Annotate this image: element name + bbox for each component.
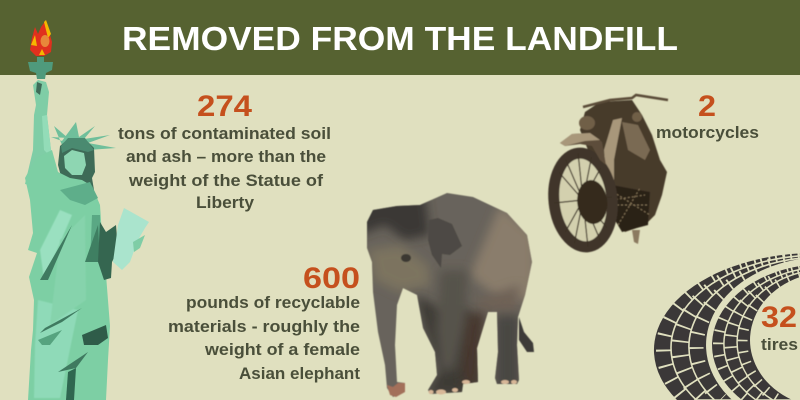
tablet hand [133, 235, 145, 252]
stat: 2 motorcycles: 2 [698, 90, 716, 123]
elephant toes [428, 380, 517, 394]
overgrown plants [606, 185, 650, 232]
elephant [355, 193, 535, 397]
hair and neck shadow [58, 139, 95, 190]
crown band [61, 138, 94, 153]
stat: 600 pounds of recyclables: weight of a female [204, 341, 360, 359]
elephant eye [401, 254, 411, 262]
stat: 32 tires: tires [761, 336, 798, 354]
stat: 274 tons of soil: 274 [197, 90, 252, 123]
front forks [604, 118, 622, 180]
stat: 600 pounds of recyclables: pounds of recyclable [186, 294, 360, 312]
tablet [113, 208, 149, 270]
trunk tip [387, 383, 405, 397]
stat: 600 pounds of recyclables: Asian elephant [239, 365, 361, 383]
front fender [560, 133, 606, 165]
statue of liberty [25, 20, 149, 400]
crown spikes [51, 122, 116, 150]
stat: 32 tires: 32 [761, 301, 797, 334]
stat: 274 tons of soil [118, 90, 331, 212]
raised arm and shoulder [25, 80, 56, 190]
stat: 274 tons of soil: and ash – more than the [126, 148, 326, 166]
handlebars [583, 95, 668, 107]
face [64, 150, 86, 175]
headlamp parts [579, 116, 595, 130]
title: REMOVED FROM THE LANDFILL [122, 20, 678, 57]
torch cup and handle [28, 57, 53, 79]
stat: 274 tons of soil: tons of contaminated soil [118, 125, 331, 143]
stat: 600 pounds of recyclables [168, 262, 361, 383]
motorcycle [549, 95, 668, 250]
stat: 2 motorcycles [656, 90, 759, 142]
robe lighter folds [34, 210, 86, 398]
shadow behind tablet arm [98, 222, 118, 280]
stat: 274 tons of soil: weight of the Statue of [128, 172, 324, 190]
header band [0, 0, 800, 75]
elephant tail [519, 317, 534, 352]
elephant shading [366, 201, 532, 394]
stat: 32 tires [761, 301, 798, 354]
stat: 2 motorcycles: motorcycles [656, 124, 759, 142]
stat: 274 tons of soil: Liberty [196, 194, 255, 212]
chest collar [60, 182, 98, 205]
motorcycle frame and engine [580, 100, 667, 232]
front wheel [549, 150, 617, 250]
robe [25, 150, 110, 400]
gas tank [622, 122, 650, 160]
stat: 600 pounds of recyclables: 600 [303, 262, 360, 295]
robe dark folds [40, 225, 72, 280]
rear wheel stub [632, 230, 640, 244]
stat: 600 pounds of recyclables: materials - roughly the [168, 318, 360, 336]
elephant ear [428, 218, 462, 268]
icon: torch flame [30, 20, 52, 56]
tire tracks [654, 253, 800, 400]
